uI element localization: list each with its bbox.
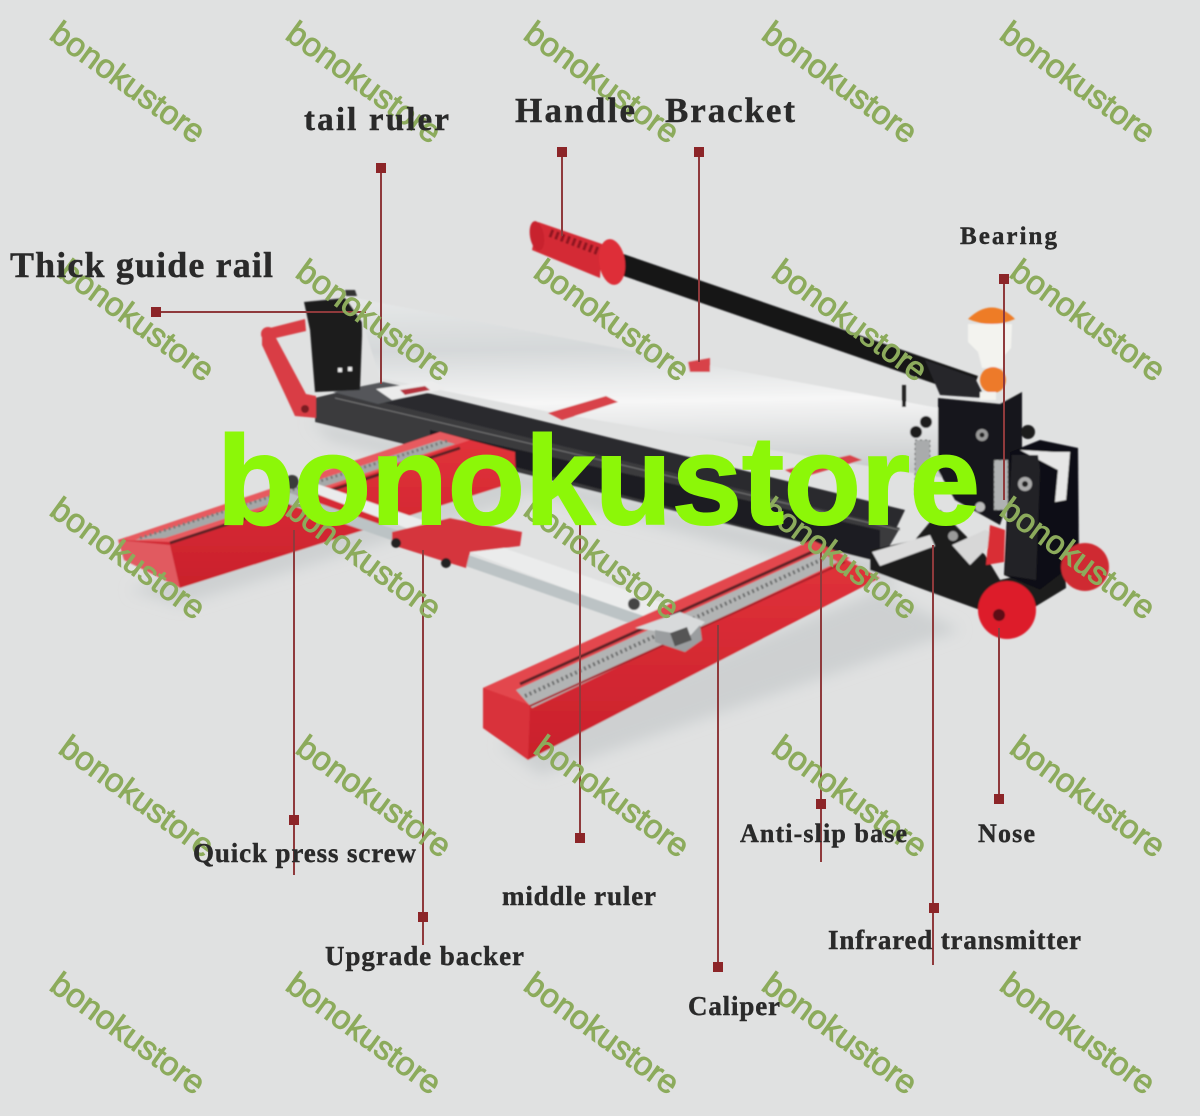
small watermarks: bonokustore — [1004, 252, 1173, 388]
label: quick press screw: Quick press screw — [193, 838, 416, 868]
small watermarks: bonokustore — [44, 965, 213, 1101]
leader: bracket — [698, 152, 700, 362]
label: tail ruler: tail ruler — [304, 102, 449, 138]
small watermarks: bonokustore — [280, 14, 449, 150]
small watermarks: bonokustore — [518, 965, 687, 1101]
red bracket — [391, 518, 522, 568]
red tail handle — [261, 319, 316, 418]
small watermarks: bonokustore — [756, 14, 925, 150]
marker squares — [151, 147, 1009, 972]
small watermarks: bonokustore — [1004, 728, 1173, 864]
small watermarks: bonokustore — [994, 490, 1163, 626]
small watermarks: bonokustore — [994, 14, 1163, 150]
small watermarks: bonokustore — [766, 728, 935, 864]
label: upgrade backer: Upgrade backer — [325, 941, 524, 971]
small watermarks: bonokustore — [756, 490, 925, 626]
tail stand — [304, 290, 362, 392]
main beam — [315, 381, 905, 562]
small watermarks: bonokustore — [518, 490, 687, 626]
small watermarks: bonokustore — [280, 965, 449, 1101]
left red arm — [118, 432, 516, 588]
small watermarks: bonokustore — [994, 965, 1163, 1101]
leader: quick press screw — [293, 530, 295, 875]
far side stops — [548, 358, 862, 478]
small watermarks: bonokustore — [290, 252, 459, 388]
leader: middle ruler — [579, 525, 581, 838]
small watermarks: bonokustore — [528, 728, 697, 864]
small watermarks: bonokustore — [518, 14, 687, 150]
small watermarks: bonokustore — [280, 490, 449, 626]
guide rail glass — [355, 298, 960, 478]
red wheels — [978, 543, 1109, 639]
floor shadows — [130, 420, 960, 775]
label: bearing: Bearing — [960, 223, 1058, 250]
slider rod — [285, 475, 690, 638]
small watermarks: bonokustore — [756, 965, 925, 1101]
leader: anti-slip base — [820, 548, 822, 862]
tile cutter machine — [118, 220, 1109, 775]
cutting head — [870, 392, 1079, 622]
label: handle: Handle — [515, 91, 635, 130]
label: thick guide rail: Thick guide rail — [10, 245, 273, 285]
label: anti-slip base: Anti-slip base — [740, 819, 907, 848]
small watermarks: bonokustore — [766, 252, 935, 388]
label: caliper: Caliper — [688, 991, 780, 1021]
square tube caliper — [628, 598, 705, 652]
small watermarks: bonokustore — [44, 490, 213, 626]
leader: nose — [998, 628, 1000, 799]
main watermark: bonokustore — [217, 410, 980, 551]
oil cup — [968, 308, 1015, 400]
small watermarks: bonokustore — [290, 728, 459, 864]
leader: handle — [561, 152, 563, 236]
leader: infrared transmitter — [932, 545, 934, 965]
label: infrared transmitter: Infrared transmitter — [828, 925, 1081, 955]
leader: bearing — [1003, 279, 1005, 500]
small watermarks: bonokustore — [53, 252, 222, 388]
springs — [910, 416, 1035, 510]
small watermarks: bonokustore — [53, 728, 222, 864]
small watermarks: bonokustore — [44, 14, 213, 150]
leader: caliper — [717, 625, 719, 967]
label: nose: Nose — [978, 819, 1035, 848]
leader: thick guide rail — [156, 311, 366, 313]
small watermarks: bonokustore — [528, 252, 697, 388]
leader: upgrade backer — [422, 550, 424, 945]
handle — [528, 220, 985, 407]
part labels — [10, 91, 1081, 1021]
leader lines and markers — [156, 152, 1004, 967]
label: bracket: Bracket — [665, 91, 795, 130]
leader: tail ruler — [380, 168, 382, 384]
right red arm — [483, 540, 880, 760]
label: middle ruler: middle ruler — [502, 881, 656, 911]
